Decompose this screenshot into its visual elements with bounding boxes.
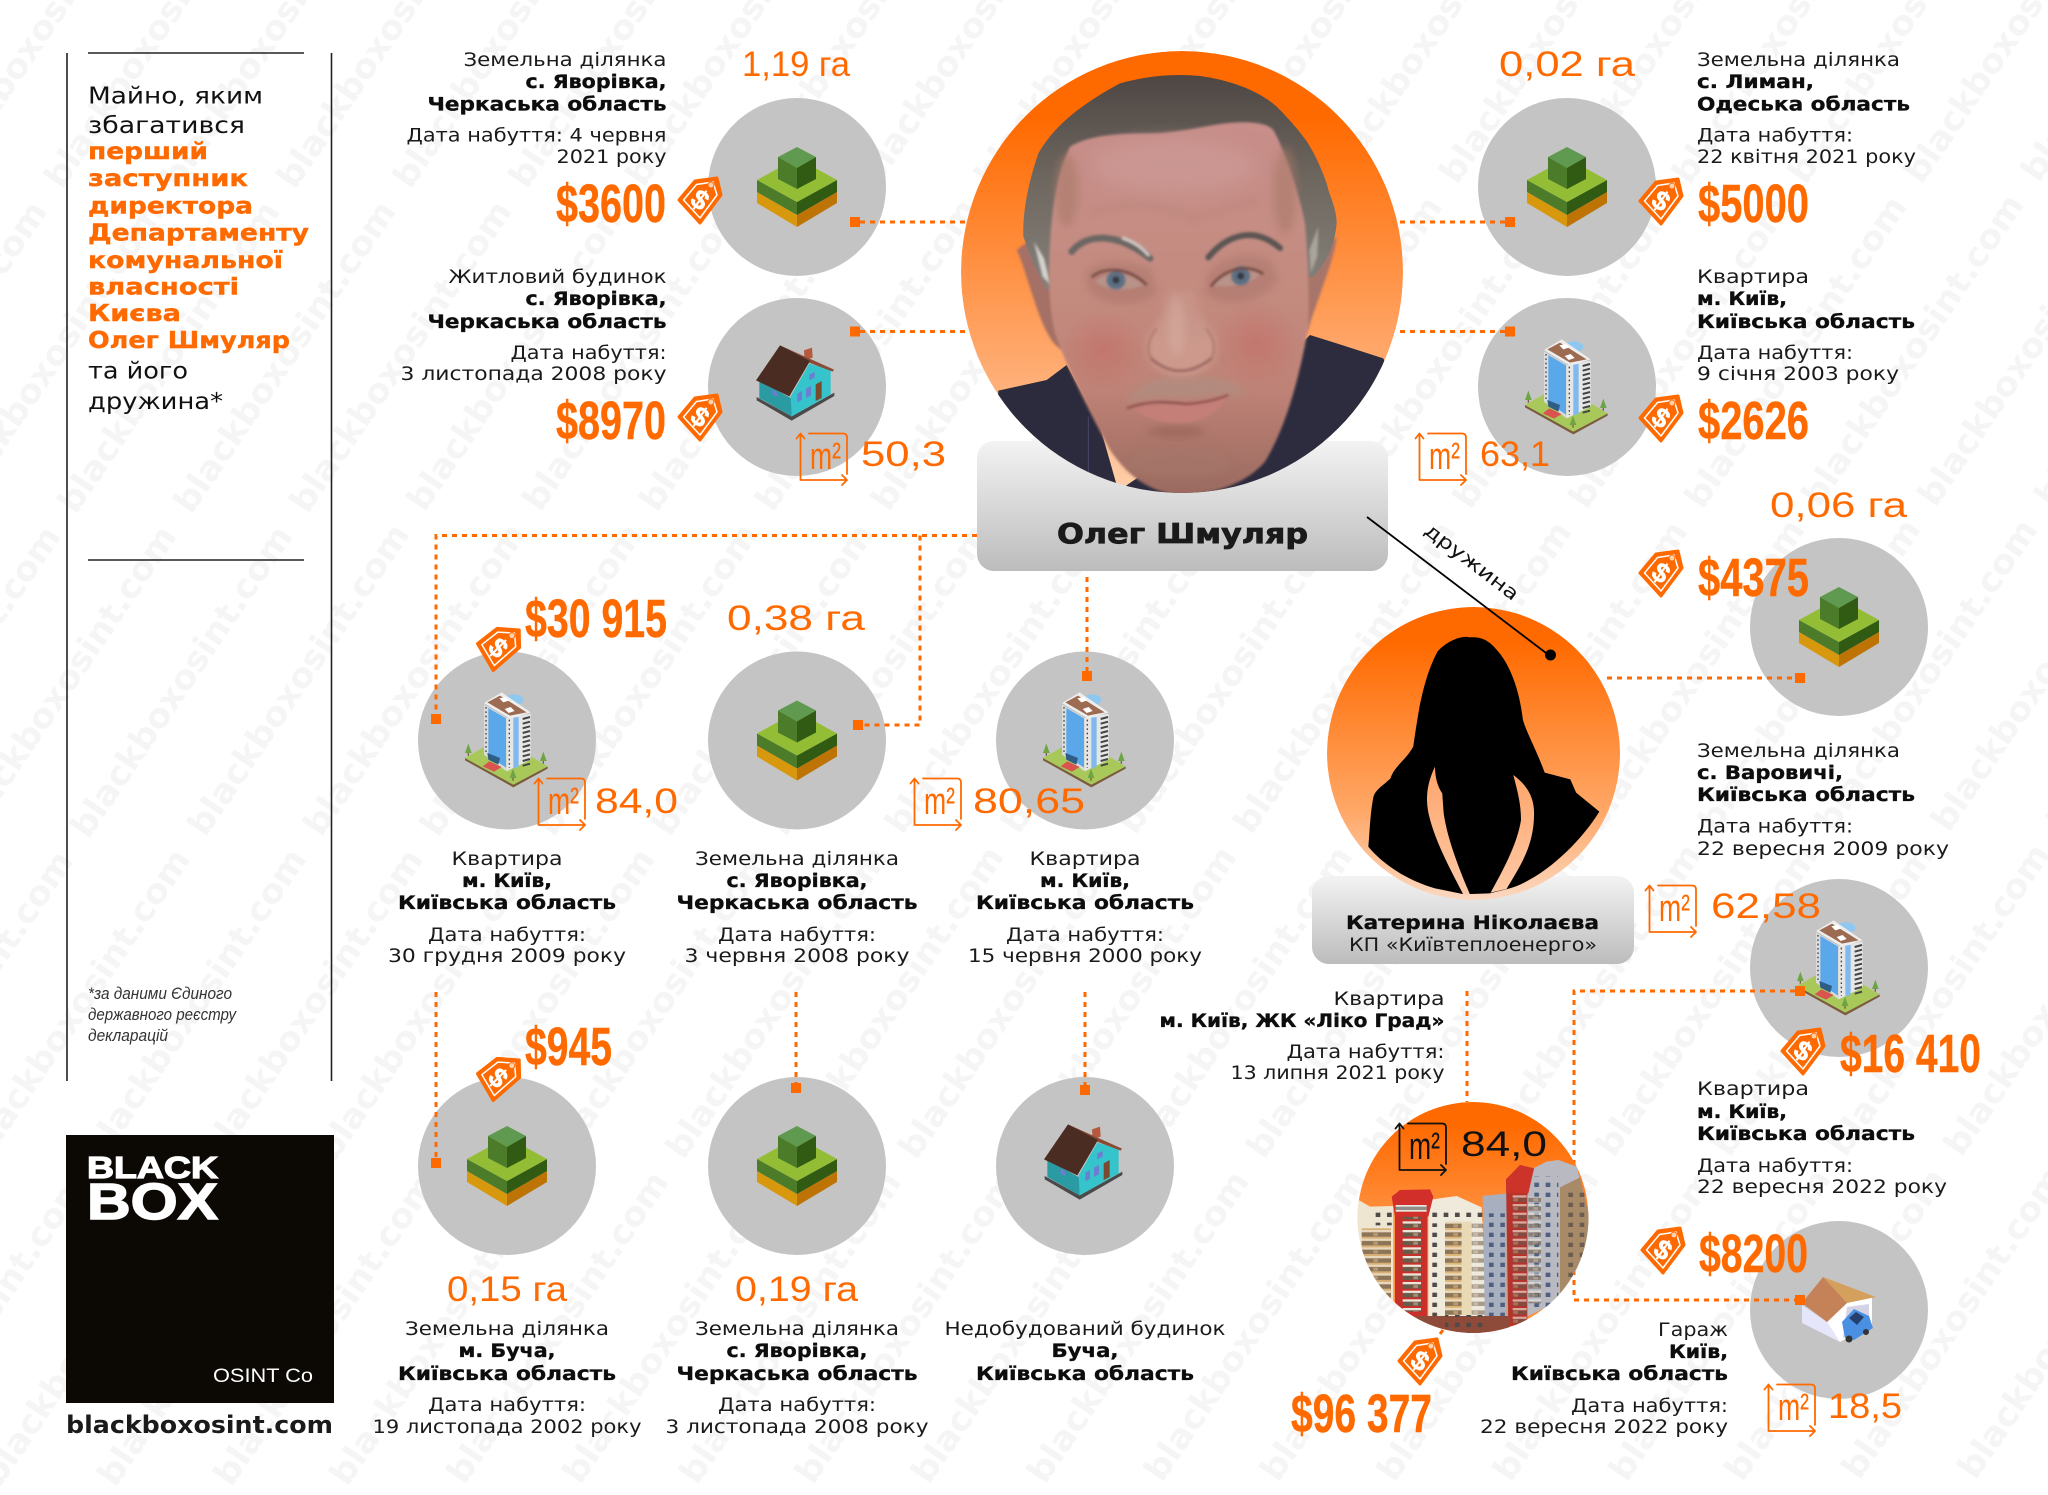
heading: intro text: перший xyxy=(88,139,208,165)
asset: apartment Kyiv 80,65: Київська область xyxy=(976,892,1194,914)
asset: apartment Kyiv 80,65: 80,65 xyxy=(973,782,1085,821)
asset: garage Kyiv: 22 вересня 2022 року xyxy=(1480,1416,1728,1438)
asset: apartment Kyiv 62,58: м. Київ, xyxy=(1697,1101,1787,1123)
asset: land Bucha 0,15 ha: Дата набуття: xyxy=(428,1394,586,1416)
heading: intro text: власності xyxy=(88,274,239,300)
asset: Liko Grad apartment text: Квартира xyxy=(1334,988,1444,1010)
asset: land Lyman: Земельна ділянка xyxy=(1697,49,1900,71)
asset: apartment Kyiv 63,1: м. Київ, xyxy=(1697,288,1787,310)
footnote: декларацій xyxy=(88,1026,168,1045)
asset: apartment Kyiv 62,58 xyxy=(1646,879,1981,1198)
asset: apartment Kyiv 63,1: m² xyxy=(1429,436,1460,478)
asset: garage Kyiv: Дата набуття: xyxy=(1571,1395,1728,1417)
asset: house Yavorivka: 3 листопада 2008 року xyxy=(400,363,666,385)
asset: land Varovychi: с. Варовичі, xyxy=(1697,762,1843,784)
asset: apartment Kyiv 80,65: м. Київ, xyxy=(1040,870,1130,892)
asset: house Yavorivka: $ xyxy=(685,400,715,434)
asset: house Yavorivka: с. Яворівка, xyxy=(526,288,666,310)
heading: intro text xyxy=(88,84,309,415)
connectors: dotted lines and markers xyxy=(431,217,1805,1345)
asset: apartment Kyiv 63,1: 9 січня 2003 року xyxy=(1697,363,1899,385)
spouse line with label: дружина xyxy=(1420,519,1523,605)
asset: land Yavorivka 1,19 ha: $ xyxy=(685,183,715,217)
heading: intro text: комунальної xyxy=(88,248,283,274)
asset: land Yavorivka 0,19 ha: 0,19 га xyxy=(735,1270,859,1309)
asset: land Bucha 0,15 ha: м. Буча, xyxy=(458,1340,556,1362)
heading: intro text: та його xyxy=(88,358,188,384)
asset: apartment Kyiv 80,65: 15 червня 2000 року xyxy=(968,945,1202,967)
asset: house Yavorivka xyxy=(400,266,946,485)
asset: land Yavorivka 0,38 ha: с. Яворівка, xyxy=(726,870,868,892)
asset: Liko Grad apartment text xyxy=(1160,988,1444,1084)
footnote: державного реєстру xyxy=(88,1005,237,1024)
asset: land Varovychi: $4375 xyxy=(1698,548,1809,608)
footnote: *за даними Єдиного xyxy=(88,984,232,1003)
logo: Black Box OSINT Co: BOX xyxy=(87,1173,218,1230)
name plate: Oleh Shmuliar xyxy=(977,441,1388,571)
asset: land Lyman: 0,02 га xyxy=(1499,45,1636,84)
asset: apartment Kyiv 62,58: Київська область xyxy=(1697,1123,1915,1145)
name plate: Kateryna Nikolaieva xyxy=(1312,876,1634,964)
asset: land Yavorivka 0,38 ha: Дата набуття: xyxy=(718,924,876,946)
asset: house Yavorivka: Черкаська область xyxy=(428,311,666,333)
asset: land Yavorivka 0,19 ha: Дата набуття: xyxy=(718,1394,876,1416)
asset: land Lyman: $ xyxy=(1646,184,1676,218)
asset: apartment Kyiv 62,58: Квартира xyxy=(1697,1078,1809,1100)
heading: intro text: заступник xyxy=(88,166,248,192)
asset: land Yavorivka 0,19 ha: Земельна ділянка xyxy=(695,1318,899,1340)
asset: house Yavorivka: Житловий будинок xyxy=(448,266,666,288)
asset: land Bucha 0,15 ha: 19 листопада 2002 року xyxy=(372,1416,642,1438)
footnote xyxy=(88,984,237,1045)
asset: apartment Kyiv 62,58: $ xyxy=(1788,1034,1818,1068)
asset: Liko Grad apartment text: Дата набуття: xyxy=(1286,1041,1444,1063)
asset: garage Kyiv: Київська область xyxy=(1511,1363,1728,1385)
heading: intro text: директора xyxy=(88,194,253,220)
asset: apartment Kyiv 80,65: Дата набуття: xyxy=(1006,924,1164,946)
asset: land Yavorivka 0,19 ha xyxy=(666,1077,928,1438)
logo: Black Box OSINT Co: OSINT Co xyxy=(213,1366,313,1387)
asset: land Yavorivka 0,38 ha: 3 червня 2008 року xyxy=(684,945,910,967)
heading: intro text: збагатився xyxy=(88,113,245,139)
asset: apartment Kyiv 62,58: $16 410 xyxy=(1840,1024,1981,1084)
asset: apartment Kyiv 84,0: м. Київ, xyxy=(462,870,552,892)
asset: land Yavorivka 1,19 ha: Черкаська область xyxy=(428,94,666,116)
panel: intro sidebar xyxy=(67,53,332,1081)
asset: land Lyman: Дата набуття: xyxy=(1697,124,1853,146)
logo: Black Box OSINT Co xyxy=(66,1135,334,1403)
asset: garage Kyiv: $ xyxy=(1648,1233,1678,1267)
name plate: Kateryna Nikolaieva: Катерина Ніколаєва xyxy=(1346,912,1599,934)
asset: apartment Kyiv 84,0: $30 915 xyxy=(525,589,667,649)
asset: land Varovychi: 0,06 га xyxy=(1770,486,1908,525)
asset: apartment Kyiv 84,0: 84,0 xyxy=(595,782,678,821)
asset: land Yavorivka 0,19 ha: 3 листопада 2008 року xyxy=(666,1416,928,1438)
asset: land Varovychi xyxy=(1640,486,1949,860)
asset: apartment Kyiv 63,1: Дата набуття: xyxy=(1697,342,1853,364)
spouse line with label xyxy=(1367,517,1550,656)
asset: land Yavorivka 0,38 ha: 0,38 га xyxy=(727,599,866,638)
asset: land Yavorivka 0,19 ha: Черкаська область xyxy=(676,1363,918,1385)
asset: garage Kyiv: $8200 xyxy=(1699,1224,1808,1284)
asset: house Yavorivka: Дата набуття: xyxy=(510,342,666,364)
asset: land Yavorivka 0,38 ha: Земельна ділянка xyxy=(695,848,899,870)
asset: land Varovychi: $ xyxy=(1646,556,1676,590)
heading: intro text: Києва xyxy=(88,301,181,327)
area badge on photo xyxy=(1396,1124,1547,1175)
asset: apartment Kyiv 84,0 xyxy=(388,589,678,967)
marker: spouse dot xyxy=(1545,650,1556,660)
asset: apartment Kyiv 84,0: $ xyxy=(482,632,514,664)
website url: blackboxosint.com xyxy=(66,1411,333,1439)
asset: apartment Kyiv 84,0: Квартира xyxy=(452,848,562,870)
asset: garage Kyiv: Київ, xyxy=(1669,1341,1728,1363)
portrait: wife silhouette xyxy=(1327,607,1620,900)
asset: Liko Grad apartment text: м. Київ, ЖК «Ліко Град» xyxy=(1160,1010,1444,1032)
asset: land Lyman: 22 квітня 2021 року xyxy=(1697,146,1916,168)
asset: apartment Kyiv 63,1: $ xyxy=(1646,401,1676,435)
asset: apartment Kyiv 63,1: Квартира xyxy=(1697,266,1809,288)
asset: unfinished house Bucha: Буча, xyxy=(1052,1340,1118,1362)
heading: intro text: дружина* xyxy=(88,389,223,415)
price: Liko Grad apartment xyxy=(1291,1339,1441,1444)
asset: land Yavorivka 0,19 ha: с. Яворівка, xyxy=(726,1340,868,1362)
asset: land Yavorivka 1,19 ha: 1,19 га xyxy=(742,45,851,84)
asset: land Bucha 0,15 ha xyxy=(372,1017,642,1438)
asset: apartment Kyiv 63,1: 63,1 xyxy=(1480,435,1550,474)
asset: house Yavorivka: $8970 xyxy=(556,391,666,451)
area badge on photo: 84,0 xyxy=(1461,1125,1547,1164)
asset: land Yavorivka 1,19 ha: 2021 року xyxy=(556,146,666,168)
asset: land Lyman: с. Лиман, xyxy=(1697,71,1814,93)
asset: apartment Kyiv 84,0: 30 грудня 2009 року xyxy=(388,945,626,967)
heading: intro text: Департаменту xyxy=(88,220,309,246)
asset: apartment Kyiv 80,65: m² xyxy=(924,781,955,823)
asset: land Lyman: Одеська область xyxy=(1697,94,1910,116)
asset: land Varovychi: 22 вересня 2009 року xyxy=(1697,838,1949,860)
asset: apartment Kyiv 62,58: Дата набуття: xyxy=(1697,1155,1853,1177)
asset: apartment Kyiv 80,65: Квартира xyxy=(1030,848,1140,870)
logo: Black Box OSINT Co: BLACK xyxy=(87,1150,219,1185)
asset: garage Kyiv xyxy=(1480,1221,1928,1438)
asset: apartment Kyiv 62,58: m² xyxy=(1659,888,1690,930)
asset: house Yavorivka: m² xyxy=(810,436,841,478)
asset: garage Kyiv: m² xyxy=(1778,1387,1809,1429)
asset: land Lyman xyxy=(1478,45,1916,276)
asset: unfinished house Bucha: Київська область xyxy=(976,1363,1194,1385)
asset: unfinished house Bucha xyxy=(944,1077,1226,1385)
asset: apartment Kyiv 63,1: Київська область xyxy=(1697,311,1915,333)
asset: apartment Kyiv 63,1 xyxy=(1416,266,1915,485)
name plate: Oleh Shmuliar: Олег Шмуляр xyxy=(1057,517,1308,550)
asset: apartment Kyiv 62,58: 62,58 xyxy=(1711,887,1821,926)
asset: garage Kyiv: 18,5 xyxy=(1828,1387,1902,1426)
asset: apartment Kyiv 80,65 xyxy=(910,652,1202,967)
asset: garage Kyiv: Гараж xyxy=(1658,1319,1728,1341)
asset: land Yavorivka 1,19 ha: $3600 xyxy=(556,174,666,234)
asset: land Yavorivka 1,19 ha: Дата набуття: 4 червня xyxy=(406,124,666,146)
asset: land Bucha 0,15 ha: Київська область xyxy=(398,1363,616,1385)
asset: land Yavorivka 1,19 ha xyxy=(406,45,886,276)
heading: intro text: Майно, яким xyxy=(88,84,263,110)
asset: apartment Kyiv 84,0: m² xyxy=(548,781,579,823)
area badge on photo: m² xyxy=(1409,1126,1440,1168)
asset: land Yavorivka 0,38 ha: Черкаська область xyxy=(676,892,918,914)
portrait: Oleh Shmuliar xyxy=(961,51,1403,497)
asset: land Bucha 0,15 ha: 0,15 га xyxy=(447,1270,568,1309)
asset: land Bucha 0,15 ha: $945 xyxy=(525,1017,612,1077)
price: Liko Grad apartment: $ xyxy=(1405,1344,1435,1378)
price: Liko Grad apartment: $96 377 xyxy=(1291,1384,1432,1444)
asset: apartment Kyiv 84,0: Дата набуття: xyxy=(428,924,586,946)
asset: land Varovychi: Земельна ділянка xyxy=(1697,740,1900,762)
asset: land Lyman: $5000 xyxy=(1698,174,1809,234)
asset: land Yavorivka 1,19 ha: с. Яворівка, xyxy=(526,71,666,93)
name plate: Kateryna Nikolaieva: КП «Київтеплоенерго» xyxy=(1349,934,1597,956)
asset: land Bucha 0,15 ha: $ xyxy=(482,1062,514,1094)
heading: intro text: Олег Шмуляр xyxy=(88,328,290,354)
asset: land Yavorivka 0,38 ha xyxy=(676,599,918,967)
asset: land Varovychi: Київська область xyxy=(1697,784,1915,806)
asset: Liko Grad apartment text: 13 липня 2021 року xyxy=(1230,1062,1444,1084)
photo: Liko Grad building xyxy=(1357,1102,1589,1336)
asset: apartment Kyiv 62,58: 22 вересня 2022 року xyxy=(1697,1176,1947,1198)
asset: unfinished house Bucha: Недобудований будинок xyxy=(944,1318,1226,1340)
asset: house Yavorivka: 50,3 xyxy=(861,435,946,474)
asset: land Varovychi: Дата набуття: xyxy=(1697,816,1853,838)
asset: land Bucha 0,15 ha: Земельна ділянка xyxy=(405,1318,609,1340)
asset: land Yavorivka 1,19 ha: Земельна ділянка xyxy=(464,49,666,71)
asset: apartment Kyiv 63,1: $2626 xyxy=(1698,391,1809,451)
asset: apartment Kyiv 84,0: Київська область xyxy=(398,892,616,914)
